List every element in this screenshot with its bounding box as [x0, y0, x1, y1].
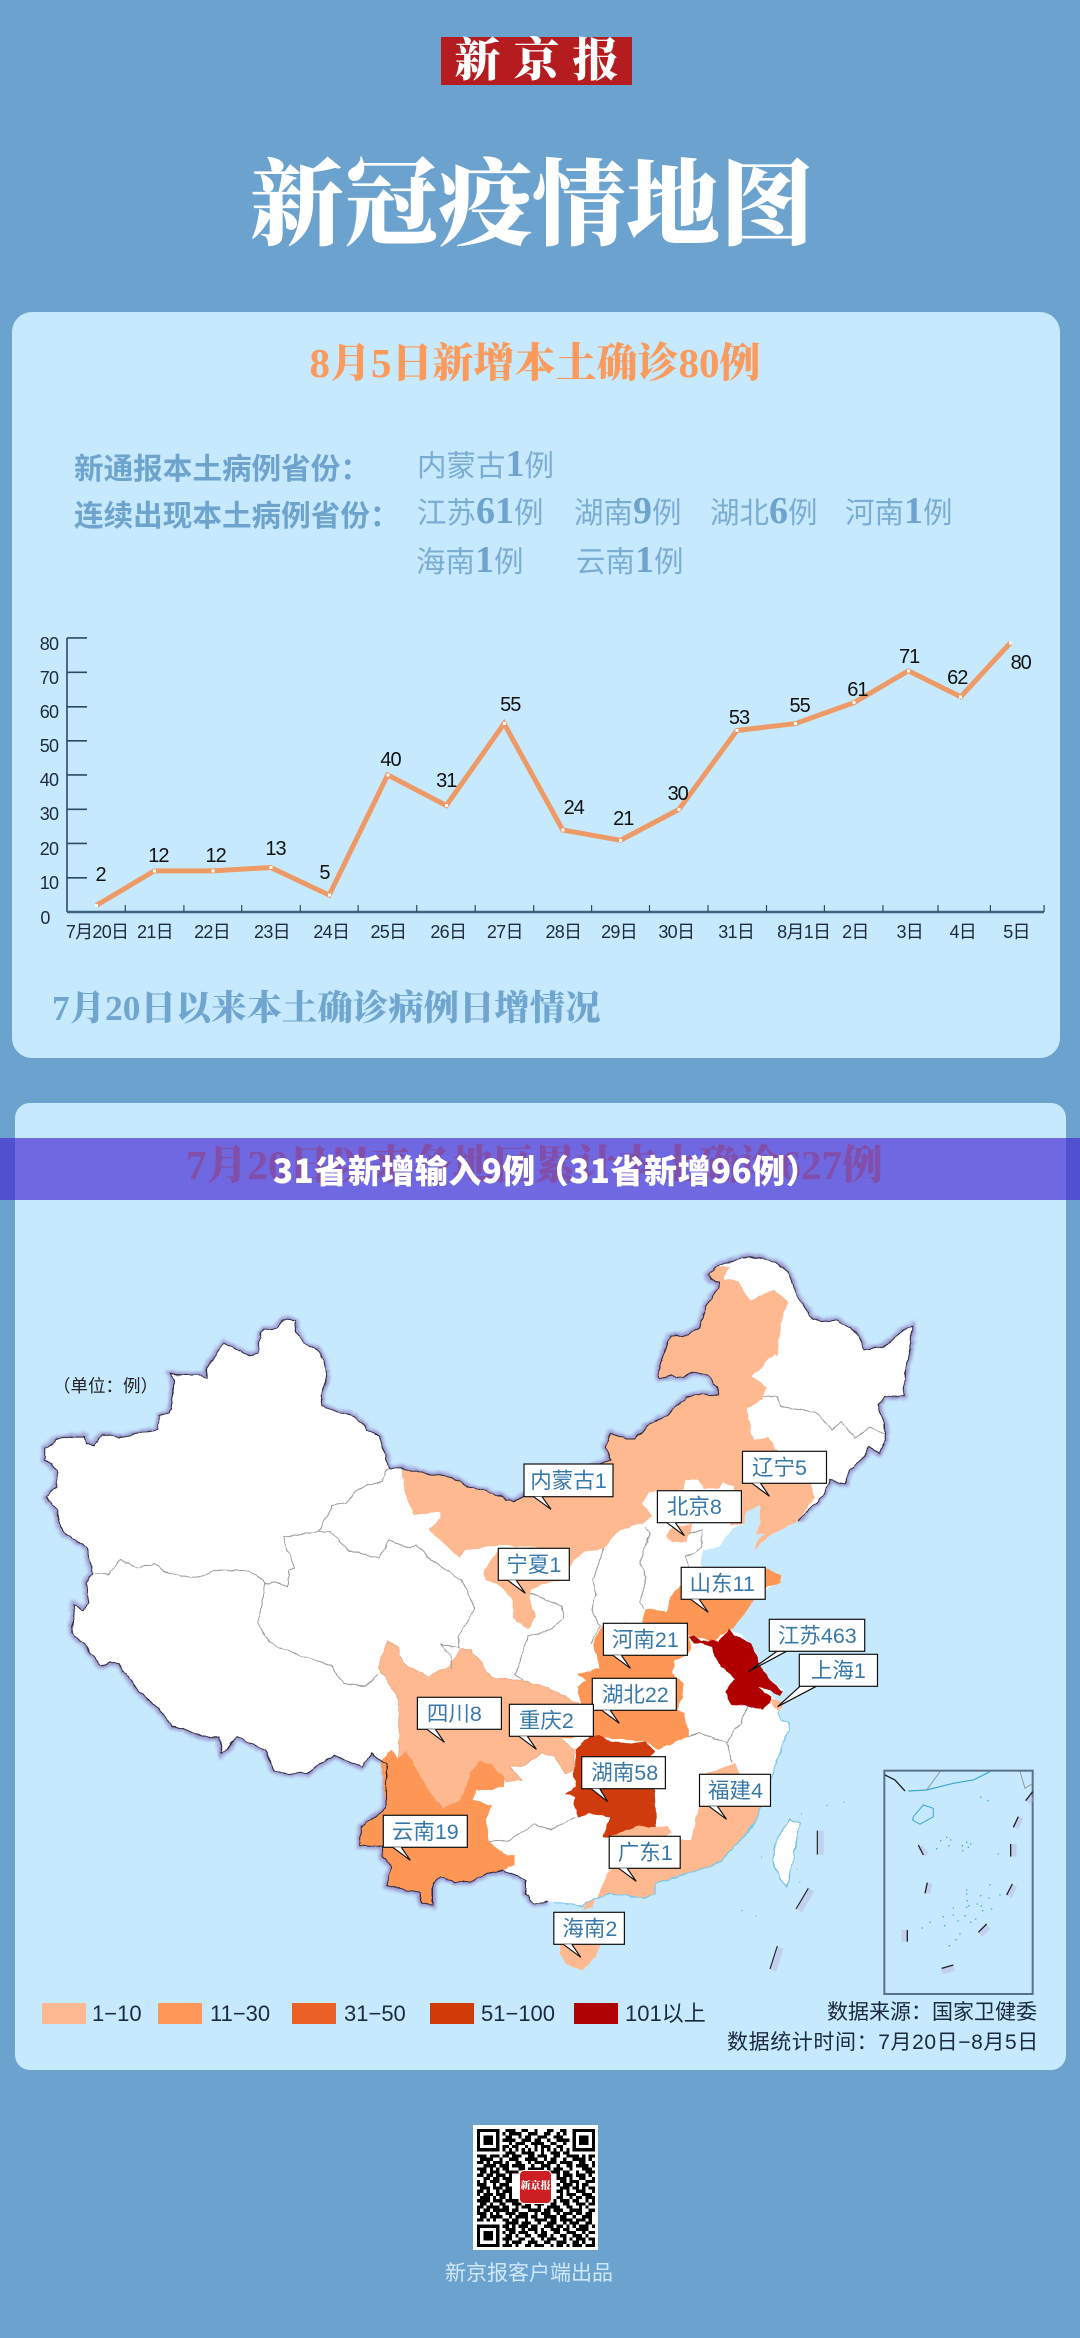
- region: Hainan: [560, 1943, 601, 1970]
- QR center logo: 新京报: [520, 2181, 550, 2192]
- logo: 新京报: 新京报: [454, 35, 632, 86]
- callout: Shanghai: [778, 1654, 878, 1707]
- heading: new cases on Aug 5: 8月5日新增本土确诊80例: [310, 340, 760, 386]
- legend: 101以上: [625, 2001, 706, 2026]
- callout: Liaoning: 辽宁5: [752, 1456, 807, 1480]
- y axis: 60: [40, 702, 59, 722]
- callout: Henan: 河南21: [612, 1628, 679, 1652]
- region: Ningxia: [484, 1548, 572, 1630]
- x axis: 7月20日: [66, 922, 128, 942]
- map of China: [39, 1252, 1034, 1995]
- source note: 数据来源：国家卫健委: [827, 2001, 1037, 2024]
- callout: Ningxia: [498, 1548, 569, 1593]
- text: value Inner Mongolia: 内蒙古1例: [417, 443, 554, 485]
- callout: Beijing: 北京8: [667, 1495, 722, 1519]
- y axis: 0: [40, 908, 50, 928]
- data labels: [96, 646, 1032, 886]
- x axis: 30日: [658, 922, 694, 942]
- region: Shanghai: [772, 1698, 783, 1712]
- line chart: daily new local cases: [40, 634, 1045, 942]
- map regions: [45, 1257, 912, 1970]
- banner: imported cases overlay: 31省新增输入9例（31省新增96例）: [273, 1145, 819, 1193]
- callout: Yunnan: 云南19: [392, 1820, 459, 1844]
- callout: Shanghai: 上海1: [811, 1659, 866, 1683]
- y axis: 70: [40, 668, 59, 688]
- callout: Shandong: [681, 1567, 765, 1612]
- data labels: 61: [847, 679, 868, 701]
- region: Inner Mongolia and Liaoning: [401, 1267, 815, 1567]
- legend: 31−50: [344, 2001, 406, 2026]
- callout: Shandong: 山东11: [690, 1572, 755, 1596]
- x axis: 25日: [370, 922, 406, 942]
- source note: 数据统计时间：7月20日−8月5日: [727, 2031, 1039, 2054]
- data labels: 12: [205, 845, 227, 867]
- callout: Jiangsu: 江苏463: [778, 1624, 857, 1648]
- callout: Hunan: 湖南58: [591, 1761, 658, 1785]
- x axis: [66, 905, 1044, 942]
- callout: Hainan: [554, 1912, 624, 1957]
- data line: [95, 642, 1012, 907]
- map callouts: [383, 1451, 878, 1957]
- callout: Yunnan: [383, 1815, 467, 1860]
- inset: South China Sea: [884, 1771, 1033, 1994]
- callout: Sichuan: [417, 1697, 501, 1742]
- region: Henan and Hubei: [562, 1623, 691, 1750]
- x axis: 29日: [601, 922, 637, 942]
- callout: Hubei: 湖北22: [602, 1683, 669, 1707]
- data labels: 5: [319, 862, 330, 884]
- callout: Hunan: [582, 1757, 665, 1802]
- y axis: 40: [40, 770, 59, 790]
- x axis: 3日: [896, 922, 923, 942]
- text: value Yunnan: 云南1例: [576, 539, 684, 581]
- y axis: 10: [40, 873, 59, 893]
- x axis: 8月1日: [777, 922, 830, 942]
- data labels: 31: [436, 770, 457, 792]
- x axis: 4日: [949, 922, 976, 942]
- chart caption: 7月20日以来本土确诊病例日增情况: [52, 988, 601, 1028]
- data labels: 71: [899, 646, 920, 668]
- x axis: 31日: [718, 922, 754, 942]
- callout: Chongqing: [509, 1704, 593, 1749]
- callout: Hubei: [592, 1678, 676, 1723]
- coast line: [555, 1712, 791, 1907]
- data labels: 40: [380, 749, 401, 771]
- x axis: 22日: [194, 922, 230, 942]
- callout: Guangdong: 广东1: [618, 1841, 673, 1865]
- province boundary lines: [95, 1397, 884, 1842]
- callout: Henan: [603, 1623, 687, 1668]
- region: Fujian and Guangdong: [582, 1763, 761, 1910]
- x axis: 5日: [1003, 922, 1030, 942]
- text: value Hainan: 海南1例: [416, 539, 524, 581]
- land border: [45, 1257, 912, 1905]
- QR code: [473, 2125, 598, 2250]
- data labels: 55: [789, 695, 811, 717]
- text: value Jiangsu: 江苏61例: [417, 490, 544, 532]
- callout: Hainan: 海南2: [562, 1917, 617, 1941]
- panel: daily new local cases: [12, 312, 1060, 1058]
- region: Sichuan and Chongqing: [379, 1642, 585, 1808]
- heading: cumulative local cases (under banner): 7月20日以来各地区累计本土确诊627例: [186, 1142, 883, 1188]
- callout: Guangdong: [609, 1836, 680, 1881]
- x axis: 27日: [487, 922, 523, 942]
- x axis: 2日: [842, 922, 869, 942]
- x axis: 23日: [254, 922, 290, 942]
- region: Hunan: [565, 1735, 656, 1837]
- callout: Sichuan: 四川8: [427, 1702, 482, 1726]
- data labels: 24: [564, 797, 585, 819]
- y axis: 30: [40, 804, 59, 824]
- region: Jiangsu: [688, 1628, 783, 1710]
- callout: Fujian: 福建4: [708, 1779, 763, 1803]
- x axis: 24日: [313, 922, 349, 942]
- y axis: 50: [40, 736, 59, 756]
- title: 新冠疫情地图: [250, 154, 814, 258]
- border glow: [45, 1257, 912, 1905]
- land base: [45, 1257, 912, 1907]
- legend: 11-30: [158, 2003, 202, 2024]
- data labels: 21: [613, 808, 634, 830]
- text: value Hubei: 湖北6例: [710, 490, 818, 532]
- callout: Jiangsu: [748, 1619, 865, 1672]
- y axis: [40, 634, 87, 928]
- legend: 31-50: [292, 2003, 336, 2024]
- data labels: 55: [500, 694, 521, 716]
- legend: 51-100: [430, 2003, 474, 2024]
- data labels: 53: [729, 707, 750, 729]
- text: newly reported provinces: 新通报本土病例省份：: [74, 445, 370, 488]
- legend: 51−100: [481, 2001, 555, 2026]
- legend: 1-10: [42, 2003, 86, 2024]
- panel: cumulative map: [15, 1103, 1066, 2070]
- x axis: 28日: [545, 922, 581, 942]
- data labels: 2: [96, 864, 107, 886]
- x axis: 21日: [137, 922, 173, 942]
- source note: [727, 2001, 1039, 2054]
- region: Taiwan: [772, 1820, 800, 1887]
- region: Yunnan: [360, 1750, 515, 1905]
- data labels: 30: [668, 783, 689, 805]
- QR center logo: [519, 2170, 552, 2204]
- data labels: 62: [947, 667, 968, 689]
- unit note: （单位：例）: [53, 1376, 158, 1396]
- callout: Beijing: [657, 1491, 741, 1536]
- y axis: 20: [40, 839, 59, 859]
- legend: [42, 2001, 706, 2026]
- footer credit: 新京报客户端出品: [445, 2262, 613, 2285]
- callout: Inner Mongolia: [524, 1464, 613, 1509]
- text: value Hunan: 湖南9例: [574, 490, 682, 532]
- text: continuing provinces: 连续出现本土病例省份：: [74, 492, 400, 535]
- legend: 11−30: [210, 2001, 270, 2026]
- data labels: 13: [265, 838, 286, 860]
- region: Beijing: [666, 1523, 693, 1543]
- data labels: 12: [148, 845, 169, 867]
- callout: Liaoning: [742, 1451, 826, 1496]
- banner: imported cases overlay: [0, 1138, 1080, 1200]
- x axis: 26日: [430, 922, 466, 942]
- south sea dashes near Taiwan: [742, 1771, 1033, 1994]
- callout: Inner Mongolia: 内蒙古1: [530, 1469, 607, 1493]
- region: Shandong: [643, 1568, 780, 1642]
- y axis: 80: [40, 634, 59, 654]
- callout: Chongqing: 重庆2: [519, 1709, 574, 1733]
- legend: 101+: [574, 2003, 618, 2024]
- legend: 1−10: [92, 2001, 142, 2026]
- callout: Fujian: [700, 1774, 770, 1819]
- data labels: 80: [1011, 652, 1032, 674]
- text: value Henan: 河南1例: [845, 490, 953, 532]
- callout: Ningxia: 宁夏1: [506, 1553, 561, 1577]
